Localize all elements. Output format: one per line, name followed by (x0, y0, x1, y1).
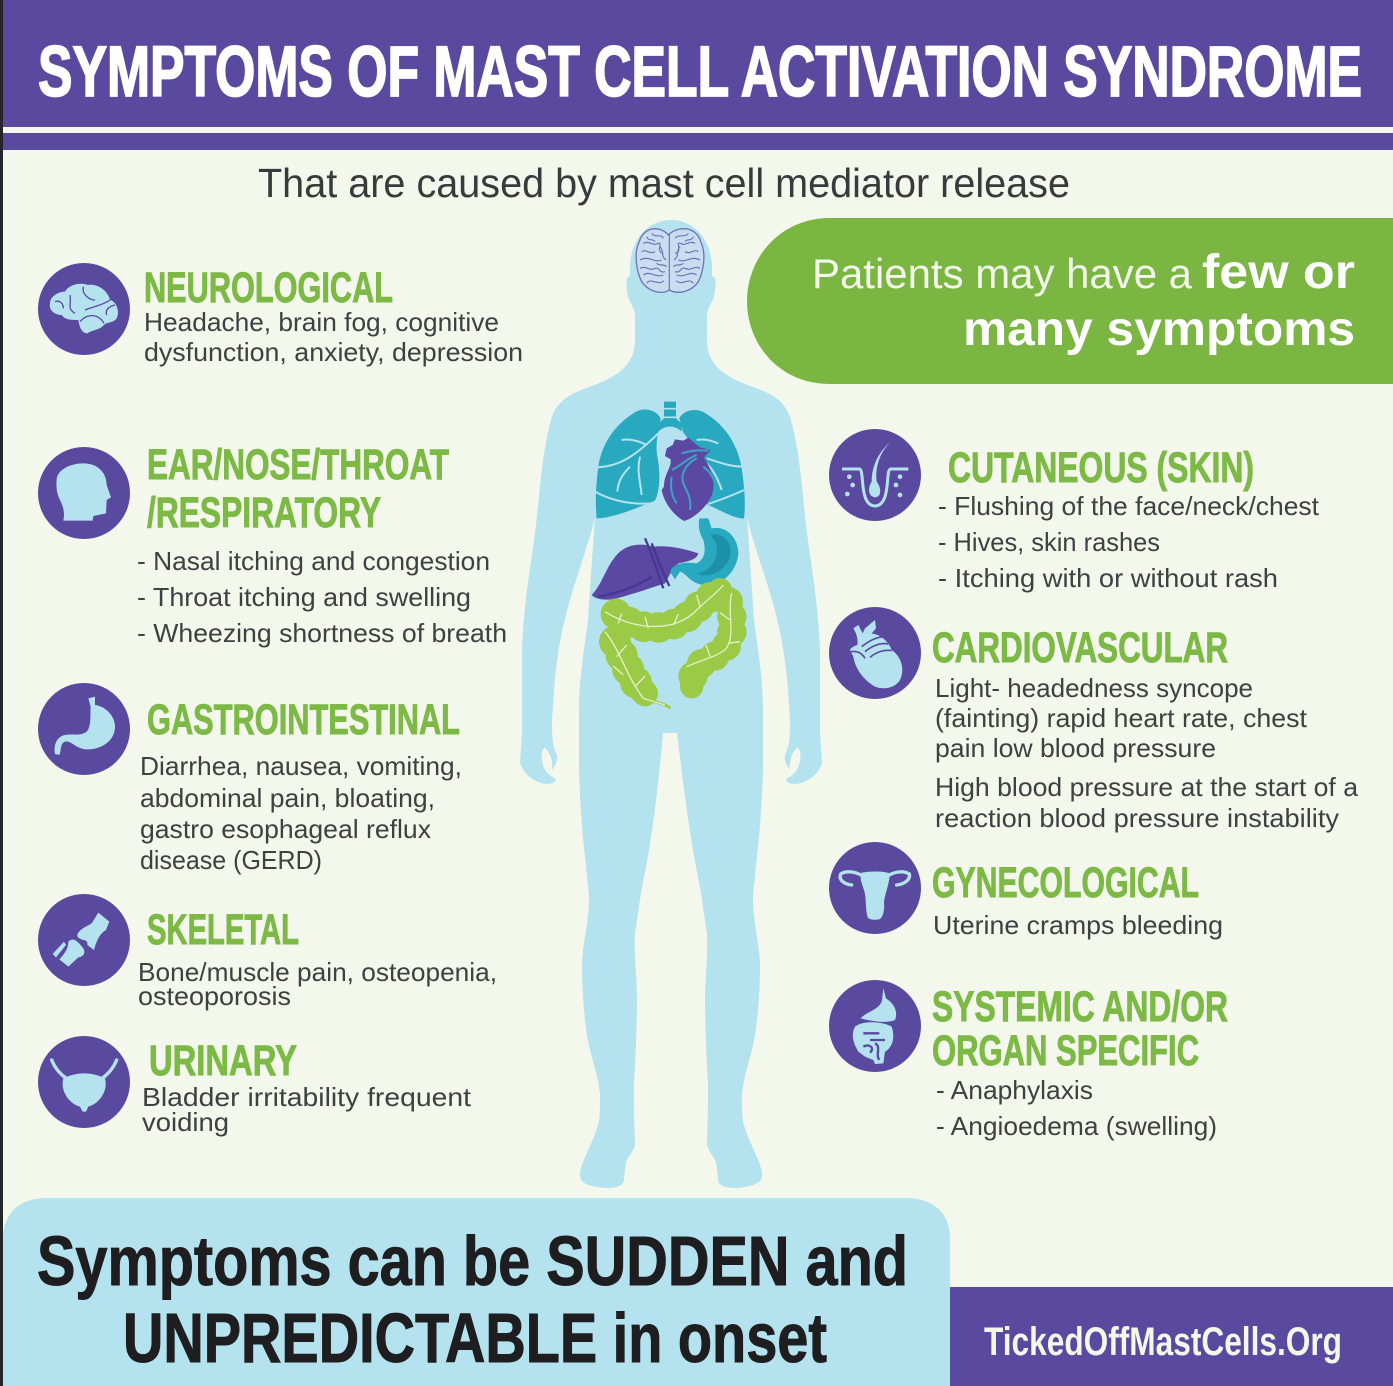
section: ear nose throat respiratory (38, 441, 507, 648)
callout: few or many symptoms: many symptoms (963, 303, 1355, 356)
section: cutaneous: CUTANEOUS (SKIN) (948, 444, 1254, 492)
stomach (670, 518, 738, 585)
section: gastrointestinal: gastro esophageal reflux (140, 814, 431, 844)
footer panel: sudden and unpredictable (3, 1198, 950, 1386)
section: skeletal: SKELETAL (147, 906, 299, 954)
section: cardiovascular: pain low blood pressure (935, 733, 1216, 763)
section: urinary (38, 1036, 472, 1137)
callout: few or many symptoms (747, 218, 1393, 384)
icon: bladder (38, 1036, 130, 1128)
section: systemic and organ specific: - Angioedema (swelling) (936, 1111, 1217, 1141)
section: skeletal (38, 894, 497, 1011)
subtitle: That are caused by mast cell mediator release (258, 160, 1070, 206)
icon: head (38, 447, 130, 539)
section: gastrointestinal: GASTROINTESTINAL (147, 696, 460, 744)
section: ear nose throat respiratory: - Throat itching and swelling (137, 582, 471, 612)
section: gynecological: Uterine cramps bleeding (933, 910, 1223, 940)
section: cutaneous: - Flushing of the face/neck/chest (938, 491, 1320, 521)
section: neurological: dysfunction, anxiety, depression (144, 337, 523, 367)
section: gynecological (829, 842, 1223, 940)
section: cardiovascular: reaction blood pressure instability (935, 803, 1339, 833)
section: ear nose throat respiratory: EAR/NOSE/THROAT (147, 441, 449, 489)
icon: bone joint (38, 894, 130, 986)
intestines (605, 585, 740, 707)
section: cardiovascular: High blood pressure at the start of a (935, 772, 1359, 802)
body figure with organs (520, 220, 822, 1188)
section: skeletal: osteoporosis (138, 981, 291, 1011)
icon: stomach (38, 683, 130, 775)
body silhouette (520, 220, 822, 1188)
callout: few or many symptoms: few or (1202, 246, 1355, 299)
section: cutaneous (829, 429, 1320, 593)
section: neurological: Headache, brain fog, cognitive (144, 307, 499, 337)
liver (592, 538, 698, 600)
section: gastrointestinal: disease (GERD) (140, 845, 322, 875)
section: ear nose throat respiratory: /RESPIRATORY (147, 489, 381, 537)
icon: heart (829, 607, 921, 699)
section: gastrointestinal (38, 683, 462, 875)
brain (636, 229, 704, 292)
section: urinary: URINARY (149, 1037, 297, 1085)
footer panel: sudden and unpredictable: UNPREDICTABLE in onset (123, 1299, 827, 1377)
section: systemic and organ specific: - Anaphylaxis (936, 1075, 1093, 1105)
icon: uterus (829, 842, 921, 934)
heart (662, 438, 715, 521)
section: cardiovascular: CARDIOVASCULAR (932, 624, 1228, 672)
section: systemic and organ specific: SYSTEMIC AND/OR (932, 983, 1228, 1031)
organs drawn over body (592, 229, 745, 707)
section: gastrointestinal: abdominal pain, bloating, (140, 783, 435, 813)
section: urinary: Bladder irritability frequent (142, 1082, 472, 1112)
section: gastrointestinal: Diarrhea, nausea, vomiting, (140, 751, 462, 781)
section: gynecological: GYNECOLOGICAL (932, 859, 1199, 907)
footer panel: sudden and unpredictable: Symptoms can be SUDDEN and (37, 1222, 908, 1300)
website box (950, 1287, 1393, 1386)
section: cardiovascular: Light- headedness syncope (935, 673, 1253, 703)
section: cardiovascular: (fainting) rapid heart rate, chest (935, 703, 1308, 733)
section: ear nose throat respiratory: - Nasal itching and congestion (137, 546, 490, 576)
section: cutaneous: - Hives, skin rashes (938, 527, 1160, 557)
section: neurological (38, 263, 523, 367)
icon: brain (38, 263, 130, 355)
icon: hair follicle (829, 429, 921, 521)
section: systemic and organ specific (829, 980, 1228, 1141)
section: skeletal: Bone/muscle pain, osteopenia, (138, 957, 497, 987)
section: cutaneous: - Itching with or without rash (938, 563, 1278, 593)
callout: few or many symptoms: Patients may have a (812, 250, 1193, 297)
header banner (0, 0, 1393, 150)
section: systemic and organ specific: ORGAN SPECIFIC (932, 1027, 1199, 1075)
section: cardiovascular (829, 607, 1359, 833)
section: ear nose throat respiratory: - Wheezing shortness of breath (137, 618, 507, 648)
icon: digestive organs (829, 980, 921, 1072)
section: neurological: NEUROLOGICAL (144, 264, 393, 312)
section: urinary: voiding (142, 1107, 229, 1137)
lungs (595, 402, 745, 518)
